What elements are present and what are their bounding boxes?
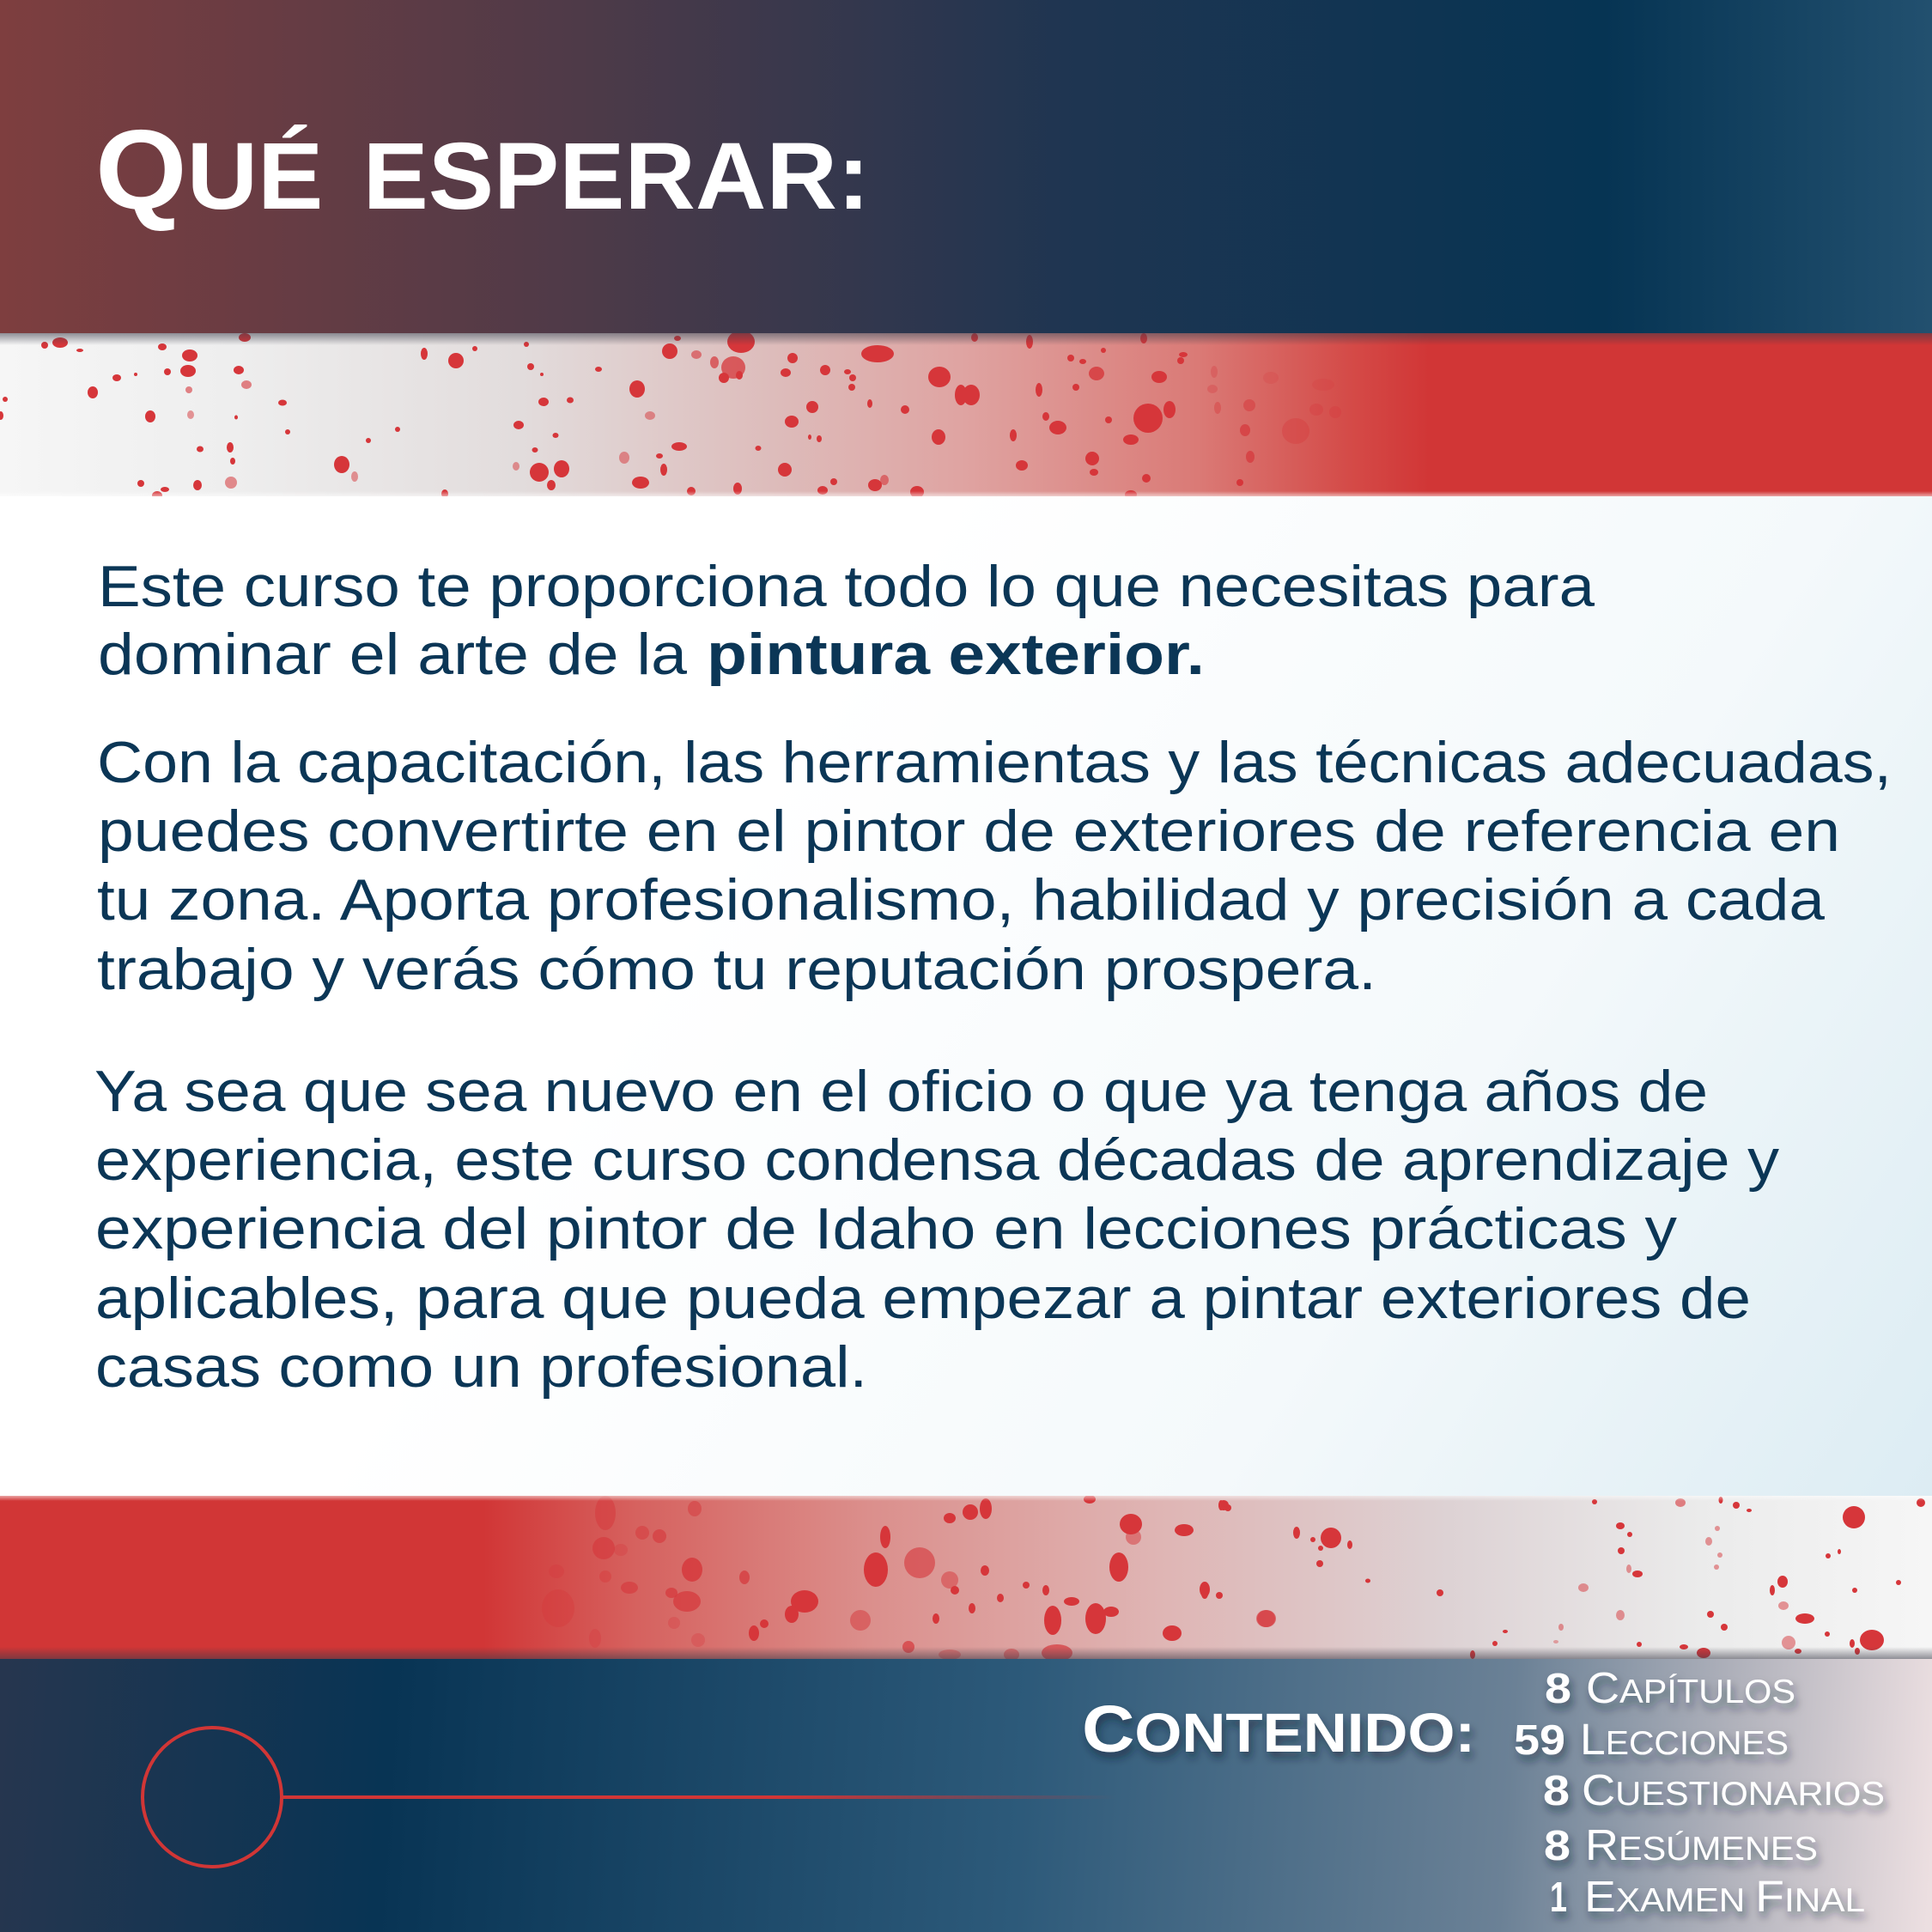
- item: chapters: CAPÍTULOS: [1586, 1663, 1795, 1712]
- third paragraph: Ya sea que sea nuevo en el oficio o que ya tenga años de: [94, 1059, 1708, 1124]
- second paragraph: [97, 730, 1892, 1002]
- content panel: [0, 496, 1932, 1496]
- second paragraph: trabajo y verás cómo tu reputación prospera.: [97, 937, 1376, 1002]
- header panel: [0, 0, 1932, 333]
- second paragraph: Con la capacitación, las herramientas y las técnicas adecuadas,: [97, 730, 1892, 795]
- intro paragraph: [98, 554, 1595, 687]
- third paragraph: [94, 1059, 1779, 1400]
- connector line: [283, 1795, 1116, 1799]
- top paint band: [0, 331, 1932, 500]
- second paragraph: tu zona. Aporta profesionalismo, habilidad y precisión a cada: [97, 867, 1825, 933]
- third paragraph: casas como un profesional.: [95, 1334, 867, 1400]
- item: lessons: LECCIONES: [1580, 1715, 1789, 1764]
- bottom band paint splatter: [542, 1495, 1925, 1662]
- title: QUÉ ESPERAR:: [95, 106, 870, 233]
- item: final exam: EXAMEN FINAL: [1584, 1872, 1865, 1921]
- icon: empty circle: [143, 1728, 282, 1867]
- third paragraph: experiencia, este curso condensa décadas de aprendizaje y: [95, 1127, 1779, 1193]
- intro paragraph: pintura exterior.: [707, 622, 1205, 687]
- item: quizzes: 8: [1543, 1768, 1570, 1814]
- top band paint splatter: [0, 331, 1341, 500]
- item: summaries: RESÚMENES: [1585, 1820, 1818, 1869]
- item: final exam: 1: [1550, 1874, 1567, 1921]
- contents list: [1514, 1663, 1885, 1921]
- second paragraph: puedes convertirte en el pintor de exteriores de referencia en: [98, 799, 1840, 864]
- footer panel: [0, 1659, 1932, 1932]
- contents heading: CONTENIDO:: [1082, 1692, 1475, 1766]
- item: lessons: 59: [1514, 1717, 1565, 1764]
- intro paragraph: dominar el arte de la: [98, 622, 687, 687]
- intro paragraph: Este curso te proporciona todo lo que necesitas para: [98, 554, 1595, 619]
- item: summaries: 8: [1544, 1823, 1571, 1869]
- item: chapters: 8: [1545, 1666, 1571, 1712]
- bottom paint band: [0, 1495, 1932, 1662]
- third paragraph: experiencia del pintor de Idaho en lecciones prácticas y: [95, 1196, 1677, 1261]
- item: quizzes: CUESTIONARIOS: [1582, 1765, 1885, 1814]
- third paragraph: aplicables, para que pueda empezar a pintar exteriores de: [95, 1266, 1751, 1331]
